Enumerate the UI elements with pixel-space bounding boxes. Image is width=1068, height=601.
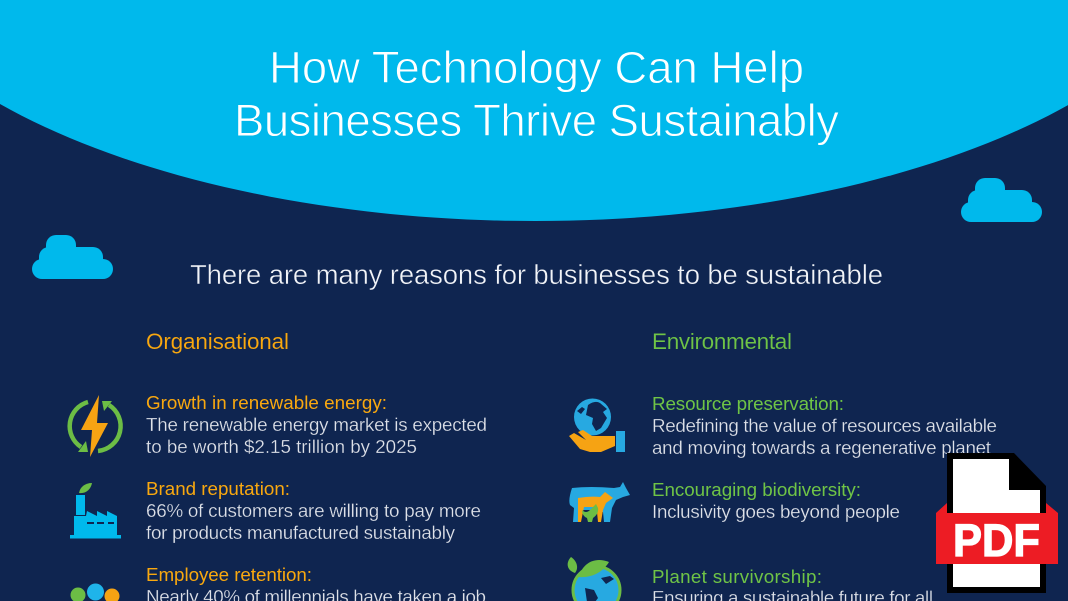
heading: Organisational: Organisational — [146, 329, 289, 354]
icon: people group — [70, 584, 120, 601]
subtitle: There are many reasons for businesses to be sustainable — [190, 259, 883, 290]
text: encouraging biodiversity — [652, 479, 900, 522]
text: brand reputation — [146, 478, 481, 543]
text: brand reputation: 66% of customers are willing to pay more — [146, 500, 481, 521]
icon: cloud right — [961, 178, 1042, 222]
title: Businesses Thrive Sustainably — [234, 95, 839, 146]
text: growth in renewable energy: to be worth $2.15 trillion by 2025 — [146, 436, 417, 457]
text: resource preservation — [652, 393, 997, 458]
header blue ellipse — [0, 0, 1068, 221]
icon: cloud left — [32, 235, 113, 279]
text: brand reputation: for products manufactured sustainably — [146, 522, 456, 543]
icon: cow, sheep and chicken — [569, 482, 630, 522]
icon: PDF badge: PDF — [953, 515, 1040, 566]
heading: Environmental: Environmental — [652, 329, 792, 354]
panel: environmental items — [568, 393, 997, 601]
icon: globe in hand — [569, 398, 625, 452]
icon: planet with leaves — [568, 557, 620, 601]
text: growth in renewable energy — [146, 392, 487, 457]
text: encouraging biodiversity: Encouraging biodiversity: — [652, 479, 861, 500]
text: planet survivorship: Planet survivorship: — [652, 566, 822, 587]
text: resource preservation: Redefining the value of resources available — [652, 415, 997, 436]
text: encouraging biodiversity: Inclusivity goes beyond people — [652, 501, 900, 522]
icon: factory with leaf — [70, 483, 121, 538]
text: planet survivorship — [652, 566, 933, 601]
panel: organisational items — [70, 392, 487, 601]
text: brand reputation: Brand reputation: — [146, 478, 290, 499]
text: employee retention — [146, 564, 486, 601]
text: resource preservation: and moving towards a regenerative planet — [652, 437, 992, 458]
text: resource preservation: Resource preservation: — [652, 393, 844, 414]
text: growth in renewable energy: The renewable energy market is expected — [146, 414, 487, 435]
title: How Technology Can Help — [269, 42, 804, 93]
text: employee retention: Employee retention: — [146, 564, 312, 585]
title — [234, 42, 839, 146]
text: growth in renewable energy: Growth in renewable energy: — [146, 392, 387, 413]
icon: lightning with green arrows — [70, 395, 121, 457]
icon: PDF badge — [936, 453, 1058, 593]
